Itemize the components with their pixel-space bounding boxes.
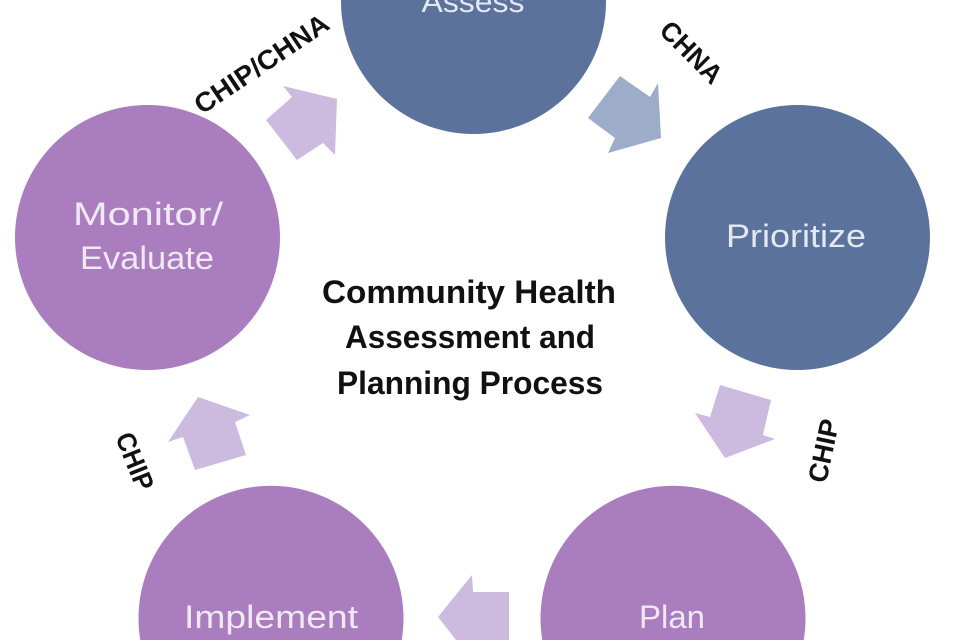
arrow: Plan to Implement <box>438 575 509 640</box>
label: CHNA: CHNA <box>654 15 729 90</box>
circle: Implement: Implement <box>184 599 358 635</box>
arrow: Assess to Prioritize <box>588 76 661 153</box>
label: CHIP left: CHIP <box>109 428 160 495</box>
circle: Monitor/Evaluate: Evaluate <box>80 240 214 276</box>
circle: Prioritize <box>665 105 930 370</box>
circle: Monitor/Evaluate: Monitor/ <box>73 196 223 232</box>
circle: Implement <box>139 486 404 640</box>
center title: Community Health <box>322 274 616 310</box>
circle: Monitor/Evaluate <box>15 105 280 370</box>
circle: Plan <box>540 486 806 640</box>
label: CHIP right: CHIP <box>803 416 845 485</box>
label: CHIP/CHNA: CHIP/CHNA <box>189 8 335 120</box>
center title: Assessment and <box>345 319 595 355</box>
circle: Prioritize: Prioritize <box>726 218 866 254</box>
center title: Planning Process <box>337 365 603 401</box>
arrow: Implement to Monitor <box>168 397 250 470</box>
arrow: Prioritize to Plan <box>695 385 775 458</box>
circle: Assess <box>341 0 606 134</box>
center title <box>322 274 616 401</box>
arrow: Monitor to Assess <box>266 86 337 160</box>
circle: Plan: Plan <box>639 599 705 635</box>
